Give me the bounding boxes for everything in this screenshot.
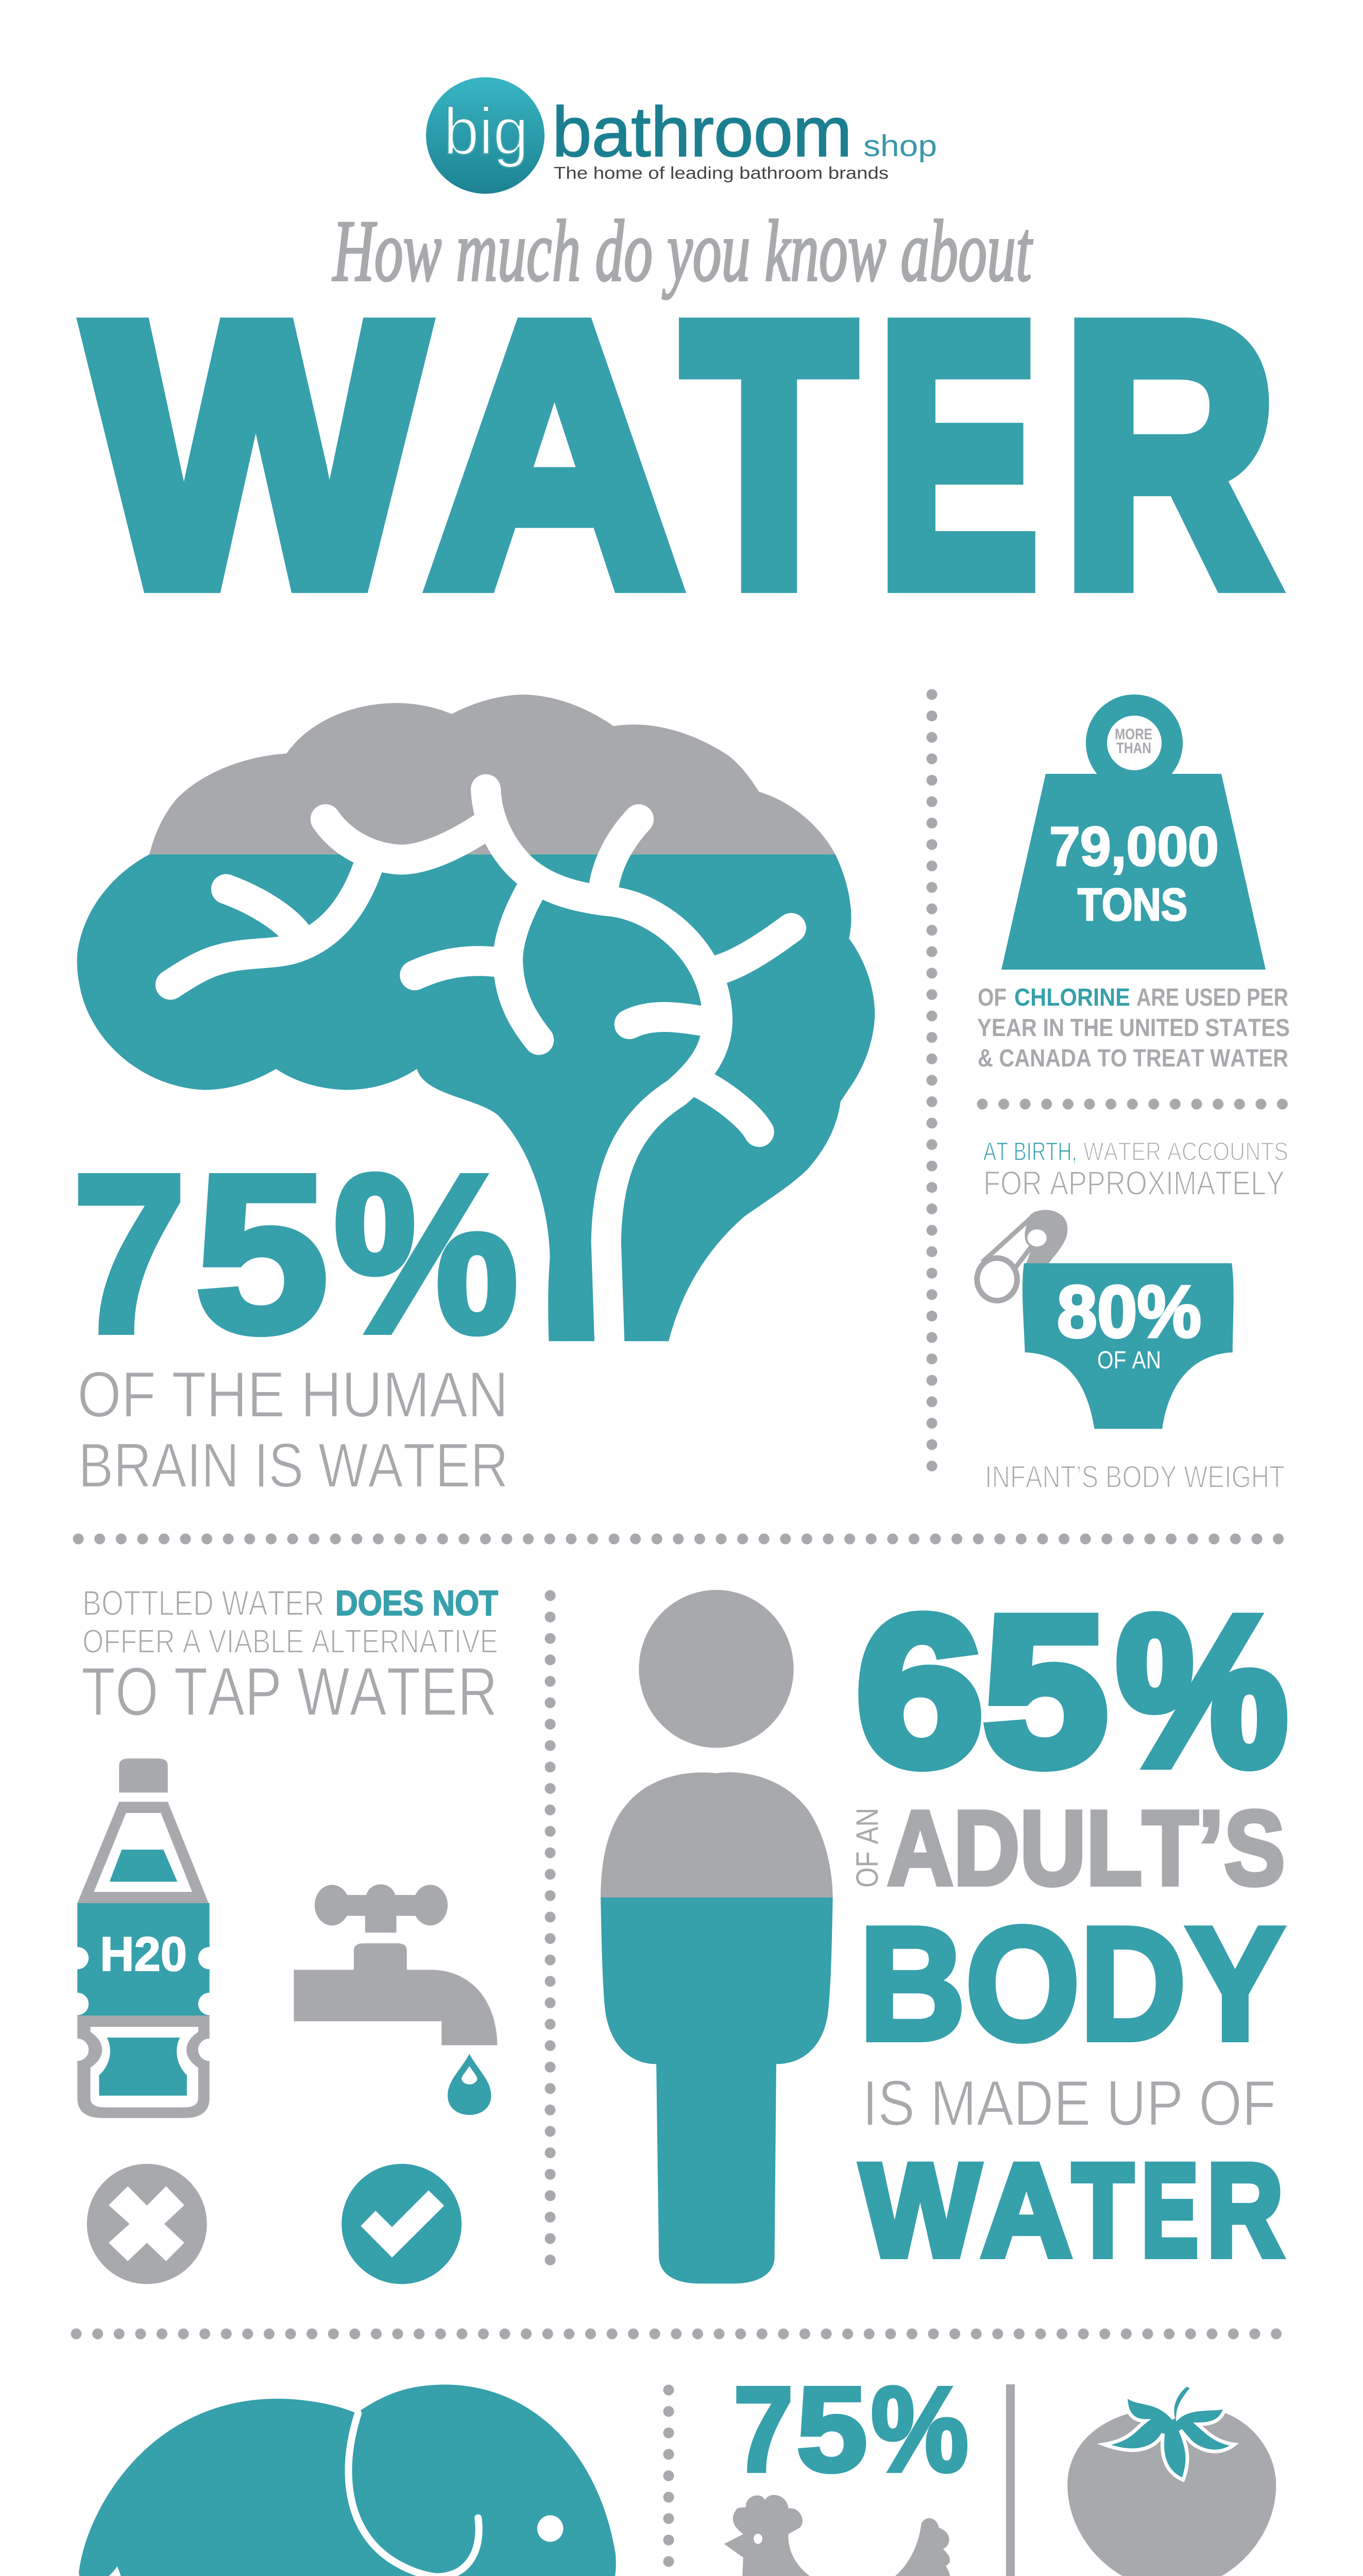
word: water: E <box>1141 2137 1198 2284</box>
logo word: bathroom: bathroom <box>552 93 852 172</box>
at birth caption <box>983 1137 1288 1202</box>
bottle label: H20 <box>100 1927 187 1981</box>
icon: brain <box>77 694 875 1353</box>
stat: 75%: % <box>334 1128 518 1379</box>
at birth caption: WATER ACCOUNTS <box>1083 1137 1288 1166</box>
caption: brain is water: BRAIN IS WATER <box>78 1430 508 1500</box>
caption: is made up of: IS MADE UP OF <box>862 2068 1276 2139</box>
chlorine caption <box>977 984 1290 1072</box>
icon: chicken <box>724 2495 950 2576</box>
icon: person <box>601 1590 833 2283</box>
bottled water heading: DOES NOT <box>335 1583 498 1623</box>
stat: chicken 75%: % <box>871 2362 968 2497</box>
chlorine caption: YEAR IN THE UNITED STATES <box>977 1014 1290 1042</box>
title: WATER: E <box>878 248 1038 662</box>
stat: 80%: 80% <box>1057 1271 1201 1353</box>
chlorine caption: OF <box>978 984 1007 1011</box>
chlorine caption: & CANADA TO TREAT WATER <box>978 1045 1288 1072</box>
arrow <box>971 2384 1049 2576</box>
panel: bottled versus tap water <box>66 1583 498 2284</box>
bottled water heading: TO TAP WATER <box>81 1654 498 1730</box>
stat: chicken 75%: 7 <box>734 2362 793 2497</box>
panel: infant body weight <box>977 1137 1288 1494</box>
vertical label: of an: OF AN <box>850 1808 884 1888</box>
stat: 65%: 5 <box>983 1573 1108 1809</box>
panel: brain <box>73 694 875 1500</box>
stat: 75%: 7 <box>73 1128 186 1379</box>
logo tagline: The home of leading bathroom brands <box>554 163 889 182</box>
more than label <box>1115 726 1152 757</box>
icon: tick <box>342 2164 462 2284</box>
logo word: shop: shop <box>863 129 937 163</box>
word: water: R <box>1207 2137 1283 2284</box>
icon: tomato <box>1067 2384 1276 2576</box>
panel: chicken and tomato water content <box>724 2362 1286 2576</box>
stat: 79,000: 79,000 <box>1049 815 1219 877</box>
bottled water heading: OFFER A VIABLE ALTERNATIVE <box>82 1622 498 1660</box>
infant's body weight caption: INFANT’S BODY WEIGHT <box>985 1460 1285 1494</box>
stat: tons: TONS <box>1078 879 1187 930</box>
chlorine caption: CHLORINE <box>1014 984 1130 1011</box>
more than label: THAN <box>1116 740 1151 757</box>
icon: nappy with safety pin <box>977 1210 1234 1429</box>
title: WATER: W <box>89 248 427 662</box>
icon: water drop <box>448 2054 491 2115</box>
word: water: W <box>861 2137 980 2284</box>
icon: cross <box>87 2164 207 2284</box>
at birth caption: AT BIRTH, <box>983 1137 1077 1166</box>
caption: of the human: OF THE HUMAN <box>77 1359 508 1431</box>
word: water: T <box>1072 2137 1133 2284</box>
word: body: BODY <box>859 1894 1284 2074</box>
of an: OF AN <box>1097 1347 1161 1374</box>
icon: elephant <box>79 2384 616 2576</box>
panel: chlorine weight <box>977 694 1290 1072</box>
stat: 65%: 6 <box>856 1573 983 1809</box>
stat: 65%: % <box>1117 1573 1287 1809</box>
more than label: MORE <box>1115 726 1152 743</box>
bottled water heading <box>81 1583 498 1730</box>
chlorine caption: ARE USED PER <box>1136 984 1288 1011</box>
title: WATER: A <box>428 248 682 662</box>
bottled water heading: BOTTLED WATER <box>82 1583 325 1623</box>
logo circle <box>426 77 544 194</box>
panel: elephant <box>78 2384 618 2576</box>
at birth caption: FOR APPROXIMATELY <box>983 1164 1285 1202</box>
stat: 75%: 5 <box>195 1128 329 1379</box>
word: adult's: ADULT’S <box>887 1789 1285 1907</box>
logo word: big: big <box>444 95 529 168</box>
panel: adult body <box>601 1573 1287 2284</box>
title: WATER: R <box>1063 248 1277 662</box>
title: WATER: T <box>684 248 855 662</box>
logo: big bathroom shop <box>426 77 937 194</box>
icon: bottle <box>66 1758 221 2118</box>
word: water: A <box>981 2137 1071 2284</box>
icon: weight <box>1001 694 1266 970</box>
icon: tap <box>294 1884 497 2045</box>
stat: chicken 75%: 5 <box>796 2362 867 2497</box>
